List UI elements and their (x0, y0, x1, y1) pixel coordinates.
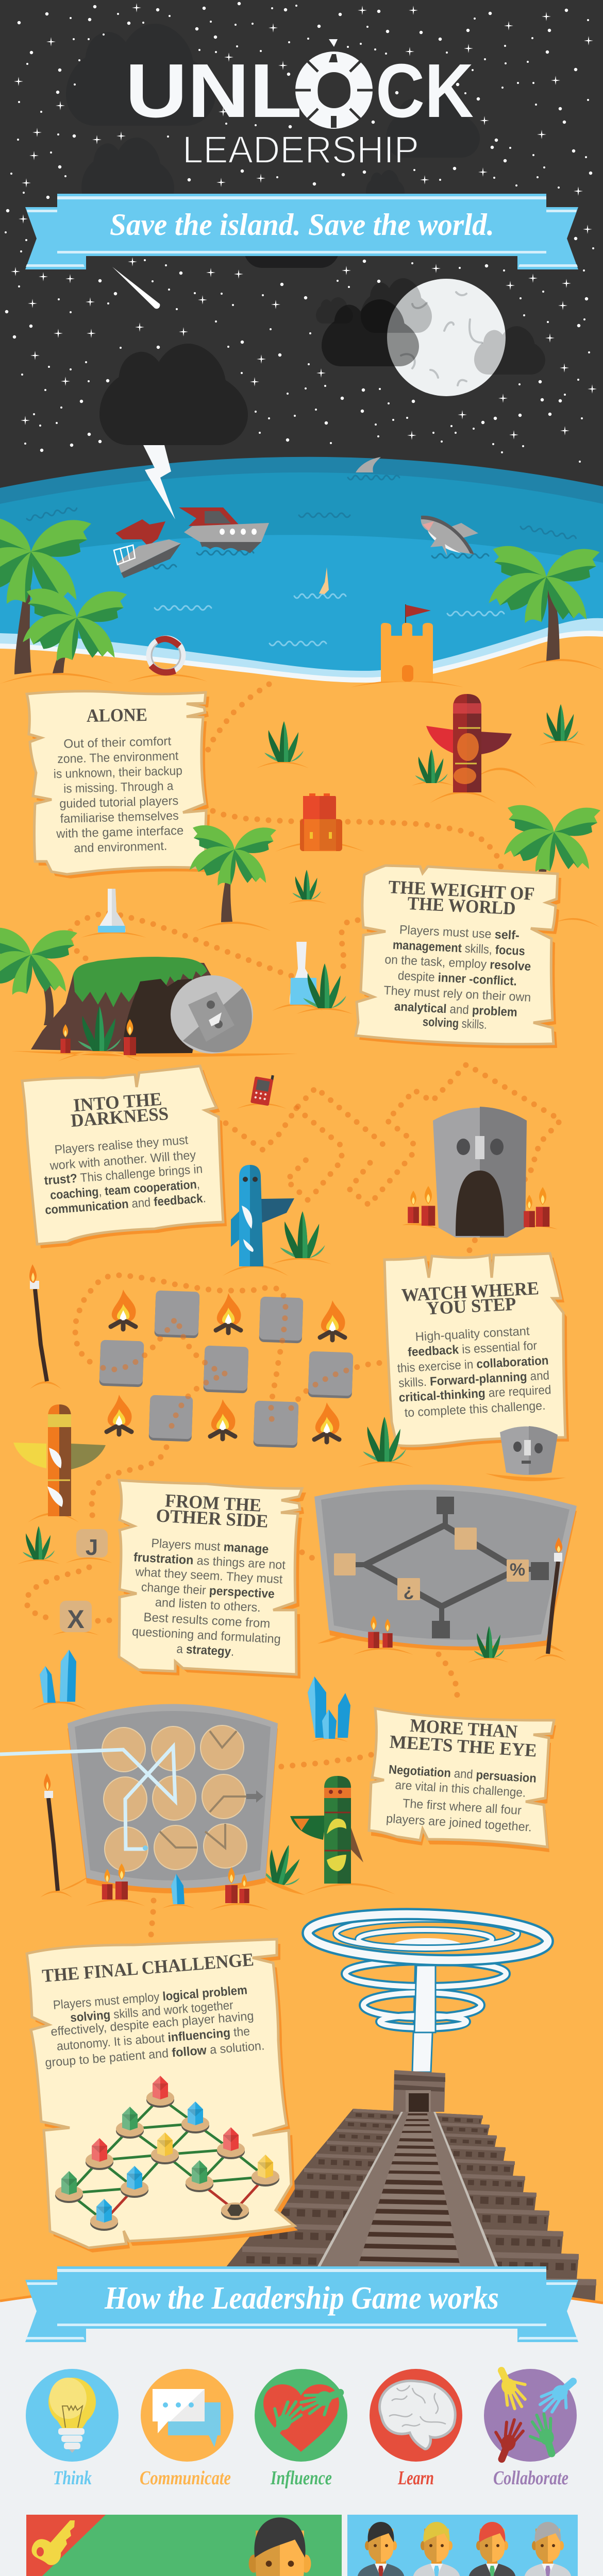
stone puzzle panel (314, 1484, 577, 1650)
rune tiles: X (67, 1605, 85, 1634)
scroll: The Weight of the World: analytical and problem (394, 999, 517, 1020)
scroll: More Than Meets the Eye: MORE THAN (409, 1715, 518, 1742)
scroll: Watch Where You Step: WATCH WHERE (401, 1278, 540, 1306)
scroll: From the Other Side: frustration as things are not (133, 1550, 286, 1572)
palm tree: centre (190, 825, 276, 922)
scroll: Watch Where You Step: skills. Forward-planning and (398, 1368, 550, 1391)
scroll: The Final Challenge: solving skills and work together (70, 1998, 233, 2025)
palm trees: shoreline (0, 517, 599, 674)
palm tree: by the cave (0, 928, 77, 1025)
cave with boulder (31, 957, 253, 1055)
icon: learn brain (370, 2369, 462, 2462)
scroll: The Final Challenge: THE FINAL CHALLENGE (41, 1949, 255, 1986)
scroll: More Than Meets the Eye: are vital in this challenge. (395, 1778, 526, 1800)
scroll: The Weight of the World: despite inner -conflict. (397, 969, 517, 989)
title: UNLOCK wordmark with lock dial: O (303, 46, 366, 137)
panel: Multiplayer (347, 2515, 578, 2576)
scroll: Watch Where You Step: this exercise in collaboration (397, 1353, 549, 1376)
crystal node diagram (55, 2076, 279, 2231)
scroll: Watch Where You Step: feedback is essential for (408, 1338, 538, 1360)
stone puzzle panel: ¿ (404, 1581, 414, 1600)
scroll: Alone (27, 691, 211, 878)
scroll: The Final Challenge: autonomy. It is about influencing the (56, 2024, 250, 2054)
label: Influence: Influence (270, 2467, 332, 2489)
scroll: The Weight of the World: THE WORLD (407, 893, 516, 919)
title: UNLOCK wordmark with lock dial (125, 39, 474, 137)
scroll: The Weight of the World: on the task, employ resolve (384, 953, 531, 974)
scroll: Into the Darkness: DARKNESS (70, 1103, 169, 1131)
scroll: Alone: is unknown, their backup (53, 764, 182, 781)
shark fin (356, 457, 381, 472)
candles by panel (368, 1616, 393, 1648)
scroll: The Weight of the World: solving skills. (422, 1015, 487, 1032)
scroll: Watch Where You Step: critical-thinking are required (398, 1383, 551, 1405)
scroll: More Than Meets the Eye: players are joined together. (386, 1811, 532, 1835)
label: Communicate: Communicate (140, 2467, 231, 2489)
jumping shark (421, 516, 478, 556)
moon (387, 279, 506, 396)
banner: how the leadership game works: How the Leadership Game works (104, 2281, 499, 2316)
stars (6, 3, 597, 462)
scroll: Into the Darkness: work with another. Will they (49, 1148, 196, 1173)
rune tiles (60, 1529, 108, 1634)
plant on scroll edge (363, 1417, 406, 1462)
scroll: From the Other Side: FROM THE (164, 1490, 262, 1516)
scroll: The Final Challenge (27, 1939, 298, 2252)
panel: Storytelling (26, 2515, 342, 2576)
scroll: Alone: Out of their comfort (63, 734, 172, 751)
orange totem (13, 1404, 106, 1516)
stepped pyramid (222, 2070, 596, 2313)
bottle (98, 889, 125, 933)
scroll: More Than Meets the Eye (369, 1708, 556, 1852)
scroll: Alone: familiarise themselves (60, 809, 179, 826)
walkie-talkie (250, 1072, 274, 1106)
scroll: Into the Darkness (22, 1066, 227, 1248)
scroll: The Final Challenge: Players must employ logical problem (53, 1983, 248, 2012)
shooting star (112, 267, 160, 309)
scroll: More Than Meets the Eye: Negotiation and persuasion (388, 1762, 537, 1786)
title: UNLOCK wordmark with lock dial: CK (376, 48, 474, 133)
scroll: From the Other Side (119, 1480, 306, 1679)
torch (29, 1264, 47, 1381)
plant in front of puzzle panel (474, 1626, 505, 1658)
label: Collaborate: Collaborate (493, 2467, 568, 2489)
scroll: Watch Where You Step: YOU STEP (426, 1293, 516, 1319)
dotted trail over stones (26, 1296, 457, 1935)
scroll: Alone: and environment. (74, 839, 167, 855)
scroll: The Weight of the World (356, 866, 561, 1048)
label: Learn: Learn (397, 2467, 434, 2489)
scroll: Alone: is missing. Through a (63, 779, 174, 796)
icon: influence heart with hands (255, 2369, 347, 2462)
scroll: Into the Darkness: Players realise they must (54, 1133, 189, 1157)
banner: save the island: Save the island. Save the world. (110, 208, 494, 242)
scroll: From the Other Side: questioning and formulating (131, 1624, 281, 1647)
rune tiles: J (86, 1535, 98, 1560)
subtitle: LEADERSHIP: LEADERSHIP (182, 128, 419, 171)
storm cloud (99, 344, 248, 445)
lightning bolt (143, 445, 175, 519)
dotted trail (69, 684, 561, 1364)
scroll: Watch Where You Step: to complete this challenge. (404, 1399, 546, 1420)
bottle and plant (290, 942, 346, 1008)
scroll: Into the Darkness: trust? This challenge brings in (44, 1162, 203, 1188)
scroll: From the Other Side: change their perspective (141, 1580, 275, 1601)
icon: think lightbulb (26, 2369, 119, 2462)
scroll: From the Other Side: what they seem. They must (135, 1565, 283, 1586)
scroll: Alone: guided tutorial players (59, 794, 179, 811)
scroll: Alone: zone. The environment (57, 749, 179, 766)
plants (23, 704, 578, 1889)
beach: foam, surf and sand (0, 618, 603, 2349)
scroll: Into the Darkness: INTO THE (73, 1089, 162, 1115)
translucent clouds over moon (316, 278, 545, 375)
scroll: Watch Where You Step (384, 1253, 569, 1450)
scroll: The Weight of the World: THE WEIGHT OF (388, 876, 535, 904)
wrecked boat: right half (179, 507, 269, 553)
scroll: From the Other Side: a strategy. (176, 1642, 234, 1659)
sandcastle (381, 604, 433, 682)
stone dial panel (0, 1704, 278, 1893)
scroll: Into the Darkness: coaching, team cooperation, (49, 1177, 200, 1202)
candles and crystal by dial panel (102, 1863, 249, 1904)
icon: red corner with key (26, 2515, 106, 2576)
stepping stones (99, 1291, 354, 1448)
background clouds (66, 24, 480, 268)
icon: collaborate hands (484, 2364, 583, 2463)
scroll: From the Other Side: OTHER SIDE (156, 1505, 269, 1532)
backpack (300, 793, 342, 851)
crystals (40, 1650, 350, 1739)
scroll: More Than Meets the Eye: The first where all four (402, 1797, 522, 1818)
ocean (0, 457, 603, 721)
torch by dial panel (44, 1773, 58, 1891)
torch by panel (548, 1537, 562, 1654)
background: night sky (0, 0, 603, 670)
palm tree: east (504, 805, 600, 872)
tornado (307, 1910, 548, 2072)
scroll: From the Other Side: and listen to others. (155, 1596, 261, 1615)
scroll: From the Other Side: Best results come from (143, 1611, 271, 1631)
banner: save the island (25, 194, 578, 269)
scroll: The Weight of the World: They must rely on their own (383, 984, 531, 1005)
life ring (149, 638, 183, 672)
blue totem (231, 1165, 294, 1266)
icon: communicate speech bubbles (141, 2369, 233, 2462)
title: UNLOCK wordmark with lock dial: UNL (125, 48, 302, 133)
icon: four players (357, 2522, 572, 2576)
scroll: Into the Darkness: communication and feedback. (44, 1191, 207, 1217)
wave marks (26, 476, 576, 646)
scroll: The Final Challenge: group to be patient and follow a solution. (45, 2039, 265, 2070)
label: Think: Think (53, 2467, 92, 2489)
green totem (290, 1776, 363, 1884)
icon: man reading book (222, 2517, 337, 2576)
scroll: The Final Challenge: effectively, despite each player having (50, 2009, 254, 2039)
scroll: Watch Where You Step: High-quality constant (415, 1324, 530, 1344)
scroll: From the Other Side: Players must manage (151, 1536, 269, 1556)
campfires (107, 1290, 345, 1442)
small stone face (500, 1426, 558, 1475)
scroll: More Than Meets the Eye: MEETS THE EYE (389, 1731, 538, 1761)
banner: how the leadership game works (25, 2266, 578, 2342)
sand mounds (0, 659, 603, 1910)
stone gate face (433, 1107, 527, 1238)
scroll: The Weight of the World: Players must use self- (399, 923, 520, 943)
sailboat (319, 567, 329, 594)
red totem (426, 694, 512, 792)
stone puzzle panel: % (510, 1560, 525, 1580)
scroll: Alone: ALONE (86, 704, 147, 726)
wrecked boat: left half (114, 519, 181, 578)
scroll: Alone: with the game interface (56, 824, 184, 841)
candles by gate (408, 1186, 549, 1227)
lower section background (0, 2279, 603, 2576)
scroll: The Weight of the World: management skills, focus (392, 938, 525, 958)
